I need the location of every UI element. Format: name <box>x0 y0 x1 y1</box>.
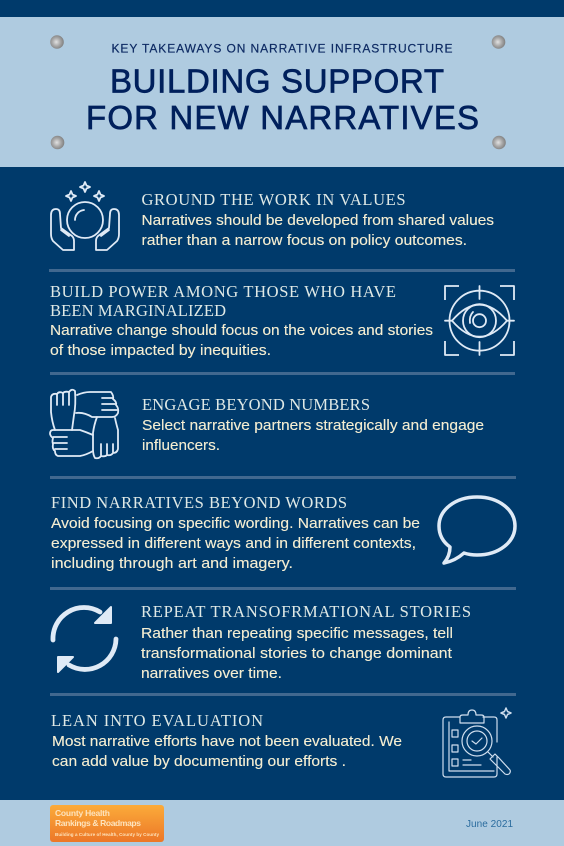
title: BUILDING SUPPORT <box>110 62 444 100</box>
heading: REPEAT TRANSOFRMATIONAL STORIES <box>141 602 471 621</box>
screw: top left <box>50 35 64 49</box>
subtitle: KEY TAKEAWAYS ON NARRATIVE INFRASTRUCTURE <box>112 42 452 56</box>
heading <box>50 282 396 320</box>
logo: County Health Rankings & Roadmaps: Rankings & Roadmaps <box>55 818 141 828</box>
body text <box>142 213 494 249</box>
body text: of those impacted by inequities. <box>50 343 271 359</box>
icon: clipboard and magnifier <box>443 708 511 777</box>
icon: speech bubble <box>439 497 515 563</box>
body text: narratives over time. <box>141 666 282 682</box>
body text <box>142 418 484 454</box>
date: June 2021 <box>466 819 513 830</box>
screw: top right <box>492 35 505 49</box>
body text: Rather than repeating specific messages, tell <box>141 626 453 642</box>
body text: Avoid focusing on specific wording. Narratives can be <box>51 516 420 532</box>
heading: BEEN MARGINALIZED <box>50 301 226 320</box>
body text: influencers. <box>142 438 220 454</box>
item 4: find narratives beyond words <box>51 493 515 572</box>
body text: including through art and imagery. <box>51 556 293 572</box>
body text <box>141 626 453 682</box>
heading: GROUND THE WORK IN VALUES <box>142 190 406 209</box>
body text: can add value by documenting our efforts . <box>52 754 346 770</box>
body text <box>51 516 420 572</box>
icon: eye in target <box>445 286 514 355</box>
body text: transformational stories to change dominant <box>141 646 452 662</box>
logo: County Health Rankings & Roadmaps <box>50 805 164 842</box>
logo: County Health Rankings & Roadmaps: County Health <box>55 808 110 818</box>
item 6: lean into evaluation <box>51 708 511 777</box>
logo: County Health Rankings & Roadmaps: Building a Culture of Health, County by County <box>55 832 159 837</box>
item 3: engage beyond numbers <box>50 390 484 458</box>
screw: bottom left <box>51 136 64 149</box>
heading: BUILD POWER AMONG THOSE WHO HAVE <box>50 282 396 301</box>
icon: hands holding a sphere <box>51 182 119 250</box>
body text <box>50 323 433 359</box>
icon: four interlocking hands <box>50 390 118 458</box>
item 5: repeat transformational stories <box>53 602 471 682</box>
body text: Select narrative partners strategically and engage <box>142 418 484 434</box>
body text: Narrative change should focus on the voices and stories <box>50 323 433 339</box>
body text: expressed in different ways and in different contexts, <box>51 536 416 552</box>
heading: LEAN INTO EVALUATION <box>51 711 263 730</box>
item 2: build power <box>50 282 514 359</box>
title: FOR NEW NARRATIVES <box>86 99 479 136</box>
heading: ENGAGE BEYOND NUMBERS <box>142 395 370 414</box>
item 1: ground the work in values <box>51 182 494 250</box>
screw: bottom right <box>492 136 506 149</box>
body text: rather than a narrow focus on policy outcomes. <box>142 233 467 249</box>
body text: Most narrative efforts have not been evaluated. We <box>52 734 402 750</box>
heading: FIND NARRATIVES BEYOND WORDS <box>51 493 347 512</box>
title <box>86 62 479 136</box>
icon: refresh arrows <box>53 607 116 672</box>
header panel <box>0 17 564 167</box>
body text <box>52 734 402 770</box>
body text: Narratives should be developed from shared values <box>142 213 494 229</box>
footer <box>0 800 564 846</box>
